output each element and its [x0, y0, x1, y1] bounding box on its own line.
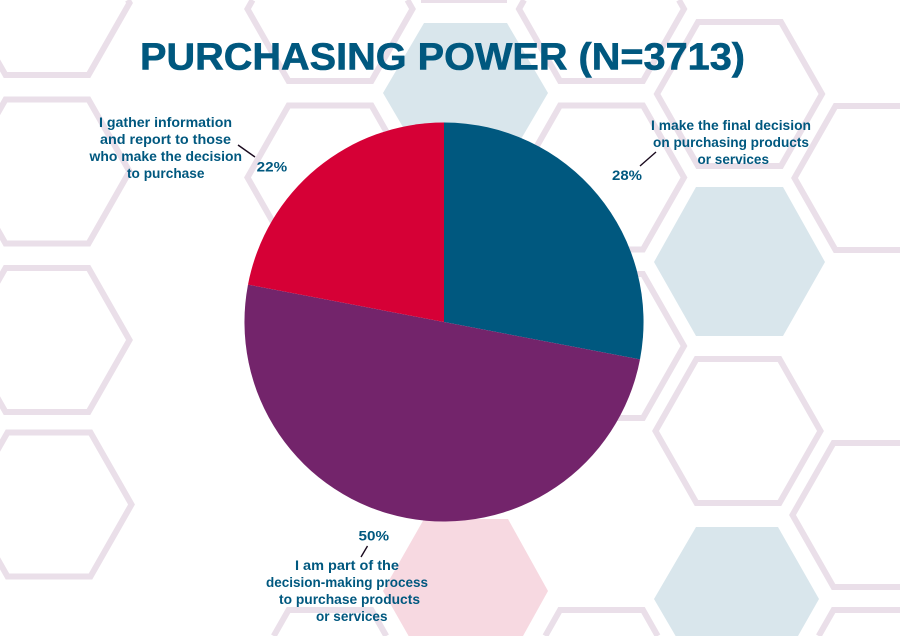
label text: I make the final decision: [651, 117, 811, 133]
label text: and report to those: [100, 131, 231, 147]
slice: gather information 22%: [248, 122, 444, 322]
label text: I am part of the: [295, 557, 399, 573]
leader line: [238, 145, 255, 157]
label text: to purchase: [127, 165, 205, 181]
label text: or services: [698, 151, 769, 167]
pie chart: [244, 122, 644, 522]
label text: decision-making process: [266, 574, 428, 590]
leader line: [640, 152, 656, 166]
label text: on purchasing products: [653, 134, 809, 150]
label text: who make the decision: [89, 148, 242, 164]
slice: final decision 28%: [444, 122, 644, 359]
value: 28%: [612, 167, 643, 183]
title: PURCHASING POWER (N=3713): [140, 36, 745, 78]
value: 22%: [257, 158, 288, 174]
label text: I gather information: [99, 114, 232, 130]
slice: part of the process 50%: [244, 285, 640, 522]
callout: 28% final decision: [612, 117, 815, 183]
label text: to purchase products: [279, 591, 420, 607]
value: 50%: [358, 528, 390, 544]
callout: 50% part of the process: [266, 528, 432, 624]
label text: or services: [316, 608, 388, 624]
callout: 22% gather information: [89, 114, 288, 181]
leader line: [361, 546, 368, 557]
